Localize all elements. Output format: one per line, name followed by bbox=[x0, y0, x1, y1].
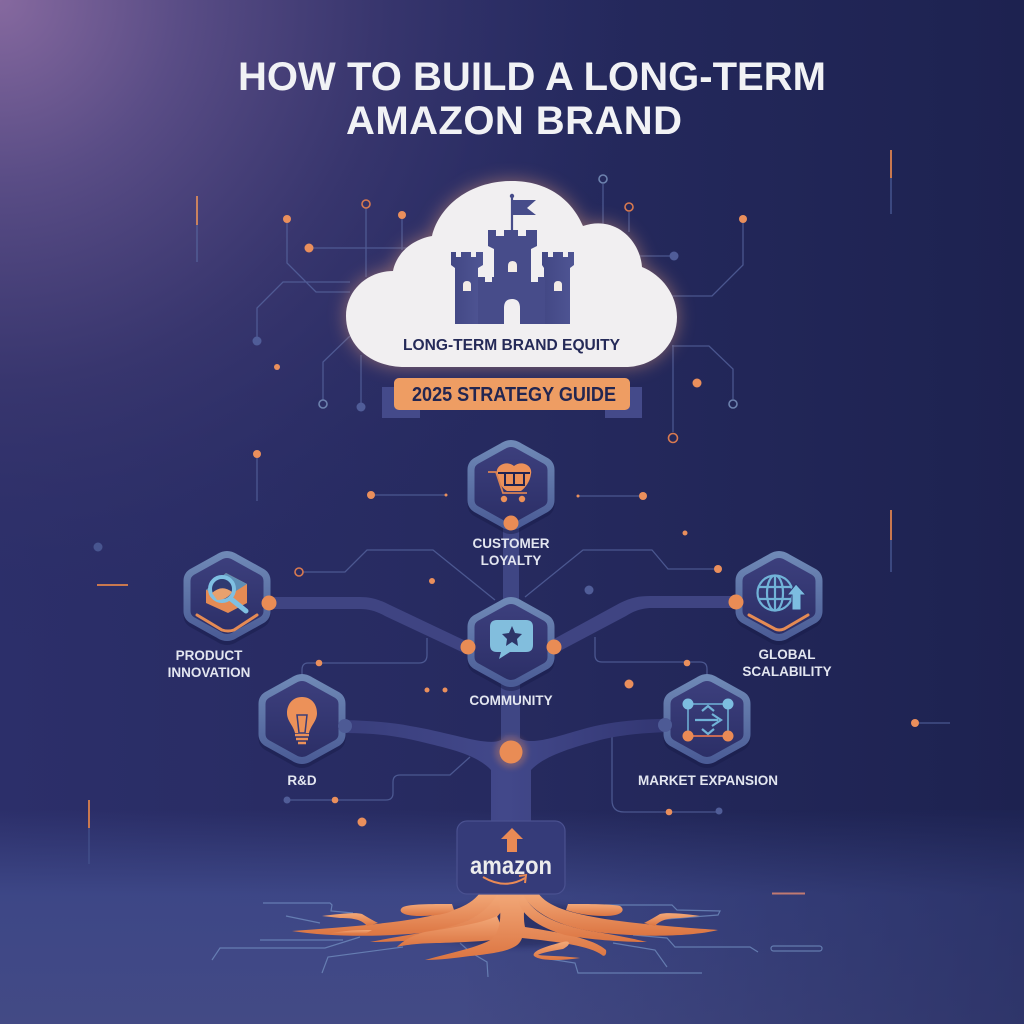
node labels: R&D bbox=[287, 773, 317, 788]
title: AMAZON BRAND bbox=[346, 99, 682, 143]
node labels: INNOVATION bbox=[168, 665, 250, 680]
connector nub bbox=[338, 719, 352, 733]
tree trunk and branches bbox=[270, 528, 736, 825]
title bbox=[238, 55, 826, 143]
circuit lines: upper network bbox=[252, 175, 747, 442]
circuit lines: middle network bbox=[253, 450, 722, 815]
arrow up bbox=[501, 828, 523, 852]
connector dot bbox=[728, 594, 744, 610]
connector dot bbox=[262, 596, 276, 610]
cloud caption: LONG-TERM BRAND EQUITY bbox=[403, 337, 620, 354]
icon: globe with up arrow bbox=[749, 575, 808, 630]
connector dot bbox=[504, 516, 518, 530]
hexagon: community bbox=[460, 600, 562, 688]
node labels: GLOBAL bbox=[758, 647, 816, 662]
roots bbox=[292, 893, 718, 960]
central junction dot bbox=[495, 736, 527, 768]
hexagon: R&D bbox=[262, 678, 352, 764]
node labels: MARKET EXPANSION bbox=[638, 773, 778, 788]
hexagon: product innovation bbox=[187, 554, 276, 642]
node labels: COMMUNITY bbox=[469, 693, 553, 708]
icon: magnifier over cube bbox=[197, 573, 257, 631]
connector dots bbox=[460, 640, 562, 654]
banner: 2025 strategy guide bbox=[382, 378, 642, 418]
amazon smile bbox=[483, 875, 526, 884]
accent ticks and scattered dots bbox=[89, 150, 950, 894]
amazon wordmark: amazon bbox=[470, 852, 552, 880]
icon: expansion frame with arrows bbox=[682, 698, 734, 742]
hexagon: global scalability bbox=[728, 554, 819, 642]
banner: 2025 strategy guide: 2025 STRATEGY GUIDE bbox=[412, 384, 616, 406]
connector nub bbox=[658, 718, 672, 732]
icon: light bulb bbox=[287, 697, 317, 743]
node labels: SCALABILITY bbox=[742, 664, 832, 679]
hexagon: customer loyalty bbox=[471, 444, 551, 530]
cloud: long-term brand equity bbox=[346, 181, 677, 367]
circuit lines: floor network bbox=[212, 903, 822, 977]
title: HOW TO BUILD A LONG-TERM bbox=[238, 55, 826, 99]
node labels: LOYALTY bbox=[481, 553, 541, 568]
icon: heart shopping cart bbox=[488, 463, 531, 502]
icon: castle bbox=[451, 194, 574, 324]
node labels: PRODUCT bbox=[176, 648, 243, 663]
node labels bbox=[168, 536, 832, 788]
hexagon: market expansion bbox=[658, 678, 747, 764]
amazon box bbox=[457, 821, 565, 894]
icon: chat bubble with star bbox=[490, 620, 533, 659]
node labels: CUSTOMER bbox=[472, 536, 550, 551]
